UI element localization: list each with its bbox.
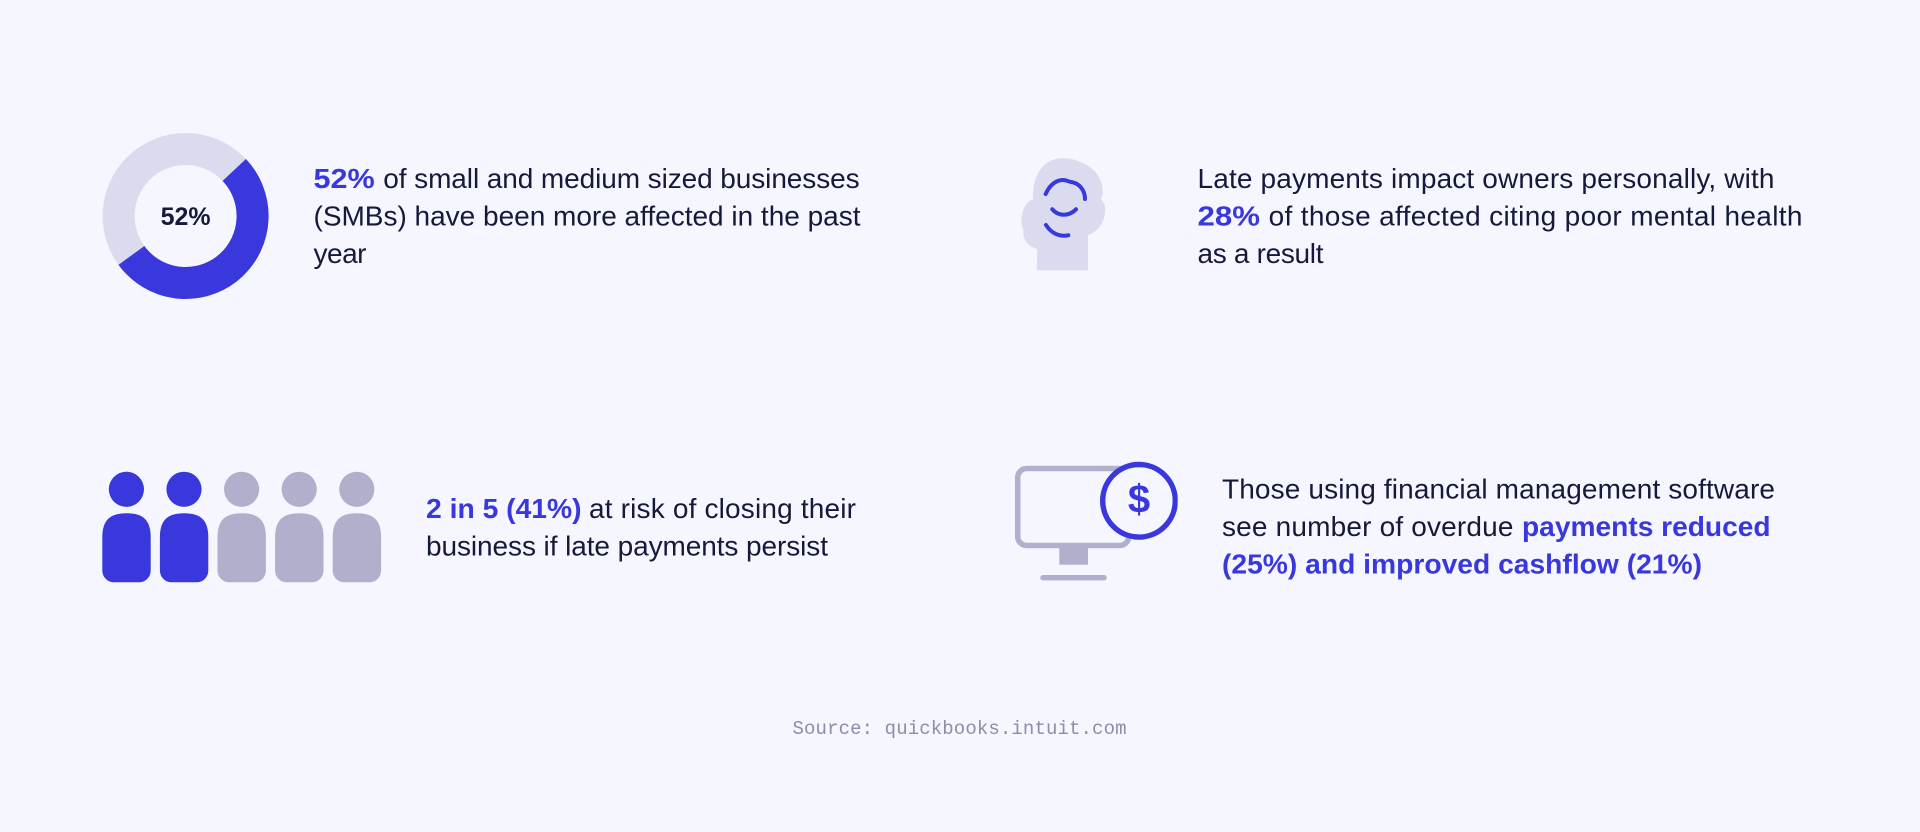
text: overdue payments reduced xyxy=(1222,474,1775,580)
text: 28% citing poor mental health: Late payments impact owners personally, with xyxy=(1198,163,1774,194)
text: 52% of SMBs: of small and medium sized businesses xyxy=(383,163,860,194)
text: overdue payments reduced: payments reduced xyxy=(1522,511,1771,542)
person 1 xyxy=(102,472,151,582)
text: 28% citing poor mental health: 28% xyxy=(1198,200,1260,232)
text: 52% of SMBs: year xyxy=(314,238,366,269)
text: 52% of SMBs xyxy=(314,163,861,269)
person 4 xyxy=(275,472,324,582)
panel: 2 in 5 at risk xyxy=(102,472,856,582)
person 2 xyxy=(160,472,208,582)
icon: head with face arcs xyxy=(1021,158,1105,270)
donut chart: 52%: 52% xyxy=(161,203,211,231)
icon: five people, two highlighted xyxy=(102,472,381,582)
donut chart: 52% xyxy=(91,121,280,311)
icon: monitor with dollar coin xyxy=(1018,464,1175,580)
text: overdue payments reduced: Those using financial management software xyxy=(1222,474,1775,504)
text: 52% of SMBs: (SMBs) have been more affected in the past xyxy=(314,200,861,232)
panel: mental health impact xyxy=(1021,158,1802,270)
text: 52% of SMBs: 52% xyxy=(314,163,375,194)
text: 2 in 5 at risk of closing xyxy=(426,493,856,562)
text: 2 in 5 at risk of closing: at risk of closing their xyxy=(589,493,856,524)
person 5 xyxy=(333,472,381,582)
text: 2 in 5 at risk of closing: 2 in 5 (41%) xyxy=(426,493,582,524)
panel: financial management software xyxy=(1018,464,1775,580)
text: overdue payments reduced: (25%) and improved cashflow (21%) xyxy=(1222,548,1702,580)
text: 2 in 5 at risk of closing: business if late payments persist xyxy=(426,530,828,562)
panel: 52% of SMBs affected xyxy=(91,121,861,311)
person 3 xyxy=(218,472,266,582)
text: 28% citing poor mental health: of those affected citing poor mental health xyxy=(1269,200,1802,232)
icon: monitor with dollar coin: $ xyxy=(1128,478,1150,522)
source note: Source: quickbooks.intuit.com xyxy=(792,718,1126,740)
text: overdue payments reduced: see number of overdue xyxy=(1222,511,1514,542)
text: 28% citing poor mental health xyxy=(1198,163,1802,269)
text: 28% citing poor mental health: as a result xyxy=(1198,238,1324,269)
